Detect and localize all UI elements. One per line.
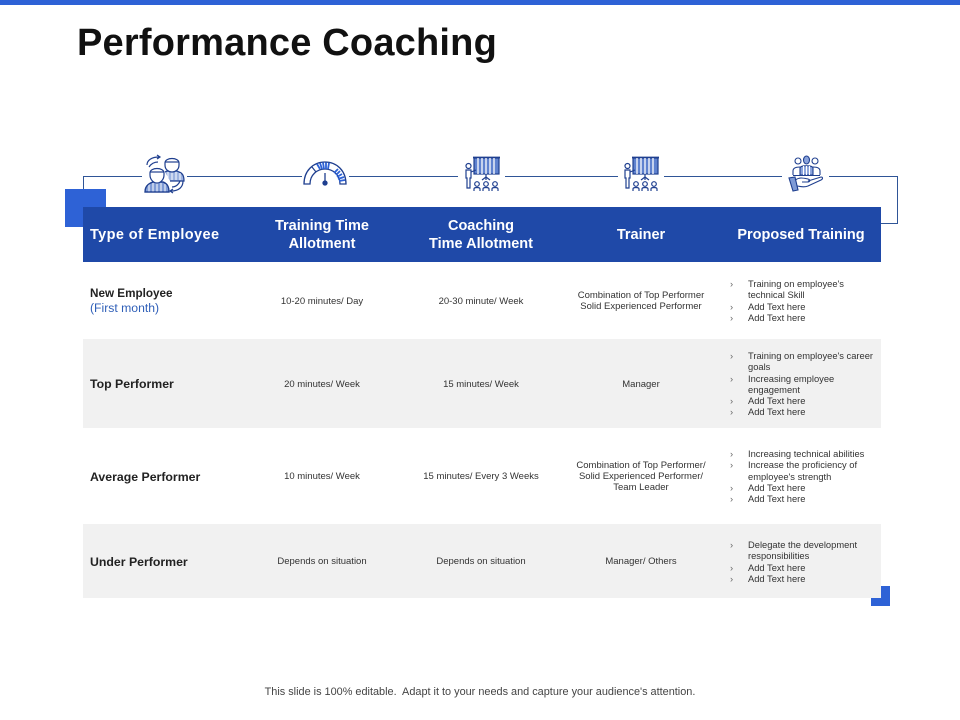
- accent square: bottom right: [871, 586, 890, 606]
- proposed training list: [730, 351, 873, 417]
- training time: Depends on situation: [277, 556, 367, 567]
- icon: gauge: [303, 161, 347, 186]
- employee name: [90, 287, 172, 315]
- proposed training list: Increasing employee: [748, 374, 834, 384]
- training time: 20 minutes/ Week: [284, 379, 360, 390]
- trainer: Manager/ Others: [605, 556, 677, 567]
- trainer: [576, 460, 706, 493]
- proposed training list: Increasing technical abilities: [748, 449, 864, 459]
- coaching time: 15 minutes/ Week: [443, 379, 519, 390]
- heading: training time allotment: Allotment: [289, 236, 355, 252]
- proposed training list: Training on employee's career: [748, 351, 873, 361]
- proposed training list: Add Text here: [748, 396, 806, 406]
- table header band: [83, 207, 881, 262]
- trainer: Solid Experienced Performer/: [579, 471, 703, 482]
- trainer: Combination of Top Performer: [578, 290, 704, 301]
- heading: type of employee: Type of Employee: [90, 227, 219, 243]
- employee name: Under Performer: [90, 555, 188, 569]
- heading: coaching time allotment: [429, 218, 533, 252]
- employee name: Top Performer: [90, 377, 174, 391]
- coaching time: 15 minutes/ Every 3 Weeks: [423, 471, 539, 482]
- proposed training list: Add Text here: [748, 563, 806, 573]
- proposed training list: [730, 449, 864, 504]
- heading: trainer: Trainer: [617, 227, 665, 243]
- proposed training list: [730, 540, 858, 584]
- row background: top performer: [83, 339, 881, 428]
- heading: training time allotment: [275, 218, 369, 252]
- trainer: [578, 290, 704, 312]
- training time: 10-20 minutes/ Day: [281, 296, 363, 307]
- trainer: Manager: [622, 379, 660, 390]
- proposed training list: Increase the proficiency of: [748, 460, 857, 470]
- row: new employee: [90, 279, 844, 323]
- proposed training list: [730, 279, 844, 323]
- row: under performer: [90, 540, 858, 584]
- proposed training list: responsibilities: [748, 551, 809, 561]
- footer note: This slide is 100% editable. Adapt it to your needs and capture your audience's attention.: [265, 686, 695, 698]
- employee name: Average Performer: [90, 470, 200, 484]
- proposed training list: Add Text here: [748, 574, 806, 584]
- trainer: Combination of Top Performer/: [576, 460, 706, 471]
- proposed training list: goals: [748, 362, 770, 372]
- coaching time: Depends on situation: [436, 556, 526, 567]
- proposed training list: Add Text here: [748, 407, 806, 417]
- proposed training list: Add Text here: [748, 302, 806, 312]
- proposed training list: Add Text here: [748, 483, 806, 493]
- employee name: (First month): [90, 301, 159, 315]
- heading: coaching time allotment: Time Allotment: [429, 236, 533, 252]
- proposed training list: engagement: [748, 385, 800, 395]
- icon: presenter one: [465, 156, 500, 191]
- proposed training list: Training on employee's: [748, 279, 844, 289]
- coaching time: 20-30 minute/ Week: [439, 296, 523, 307]
- heading: training time allotment: Training Time: [275, 218, 369, 234]
- proposed training list: Delegate the development: [748, 540, 857, 550]
- title: Performance Coaching: [77, 22, 497, 64]
- row: top performer: [90, 351, 873, 417]
- proposed training list: employee's strength: [748, 472, 831, 482]
- training time: 10 minutes/ Week: [284, 471, 360, 482]
- trainer: Team Leader: [613, 482, 669, 493]
- employee name: New Employee: [90, 287, 172, 300]
- top accent bar: [0, 0, 960, 5]
- icon: employees swap: [144, 154, 185, 194]
- proposed training list: technical Skill: [748, 290, 805, 300]
- icon: people on hand: [788, 156, 824, 192]
- proposed training list: Add Text here: [748, 313, 806, 323]
- accent square: top left: [65, 189, 106, 227]
- heading: coaching time allotment: Coaching: [448, 218, 514, 234]
- heading: proposed training: Proposed Training: [737, 227, 865, 243]
- proposed training list: Add Text here: [748, 494, 806, 504]
- icon: presenter two: [624, 156, 659, 191]
- row background: under performer: [83, 524, 881, 598]
- trainer: Solid Experienced Performer: [580, 301, 702, 312]
- row: average performer: [90, 449, 864, 504]
